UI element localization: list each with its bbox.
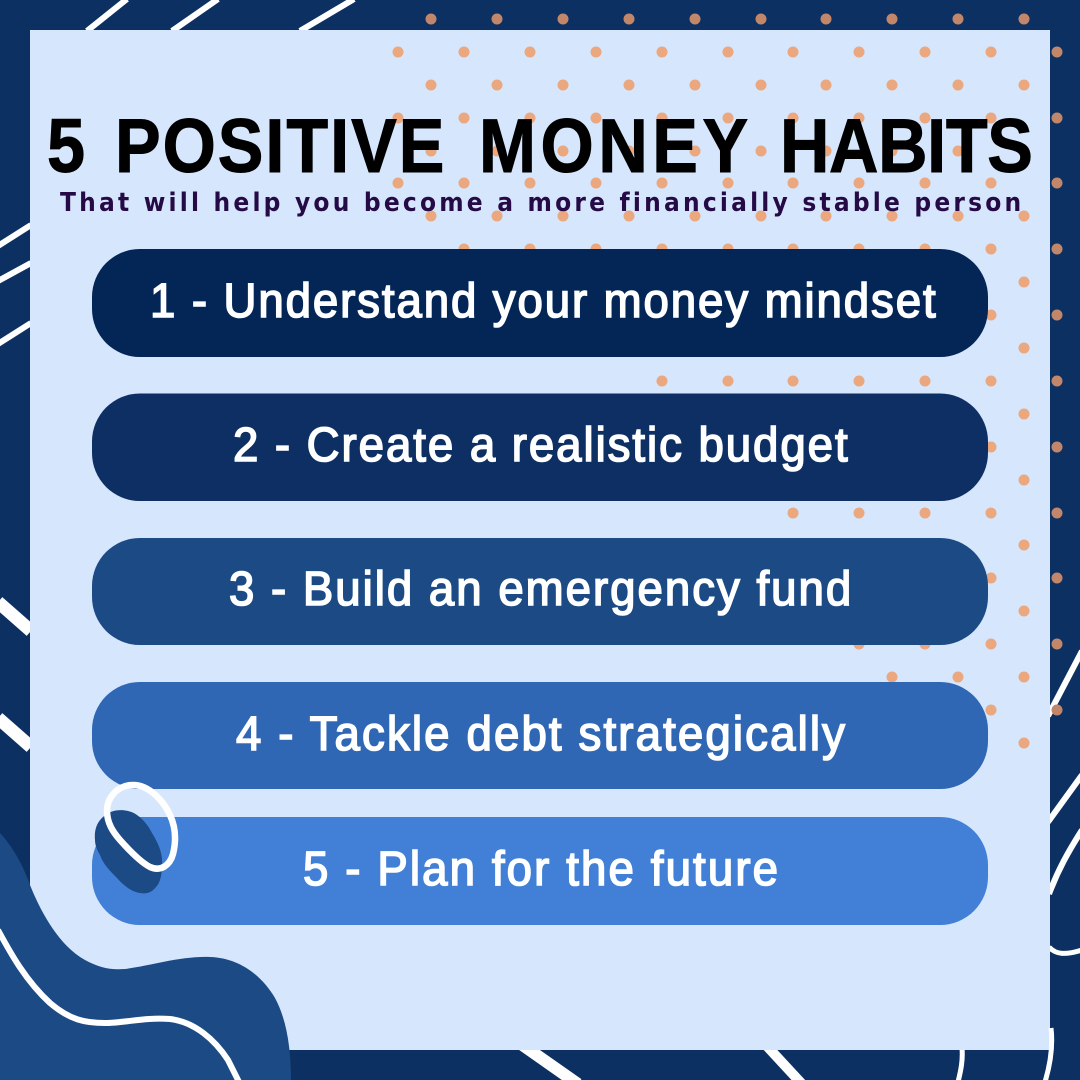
title: HABITS: [780, 105, 1033, 189]
title: MONEY: [479, 105, 748, 189]
dots on navy border: [431, 19, 1057, 710]
habit 5 pill: 5 - Plan for the future: [303, 842, 778, 895]
habit 2 pill: 2 - Create a realistic budget: [233, 418, 848, 471]
dark oval accent: [95, 810, 162, 893]
title: [47, 105, 1033, 189]
habit 4 pill: 4 - Tackle debt strategically: [236, 707, 846, 760]
habit 1 pill: 1 - Understand your money mindset: [150, 274, 936, 327]
habit 1 pill: [92, 249, 988, 357]
habit 3 pill: 3 - Build an emergency fund: [229, 562, 851, 615]
habit 5 pill: [92, 817, 988, 925]
decorative blob bottom-left: [0, 833, 291, 1080]
line at panel corner: [1045, 1028, 1052, 1080]
title: 5: [47, 105, 85, 189]
subtitle: That will help you become a more financially stable person: [60, 187, 1021, 217]
white ring accent: [107, 785, 175, 869]
title: POSITIVE: [115, 105, 444, 189]
blob white curve: [0, 930, 239, 1080]
habit 2 pill: [92, 394, 988, 501]
dots on light panel: [398, 52, 1024, 743]
habit 4 pill: [92, 682, 988, 789]
habit 3 pill: [92, 538, 988, 645]
